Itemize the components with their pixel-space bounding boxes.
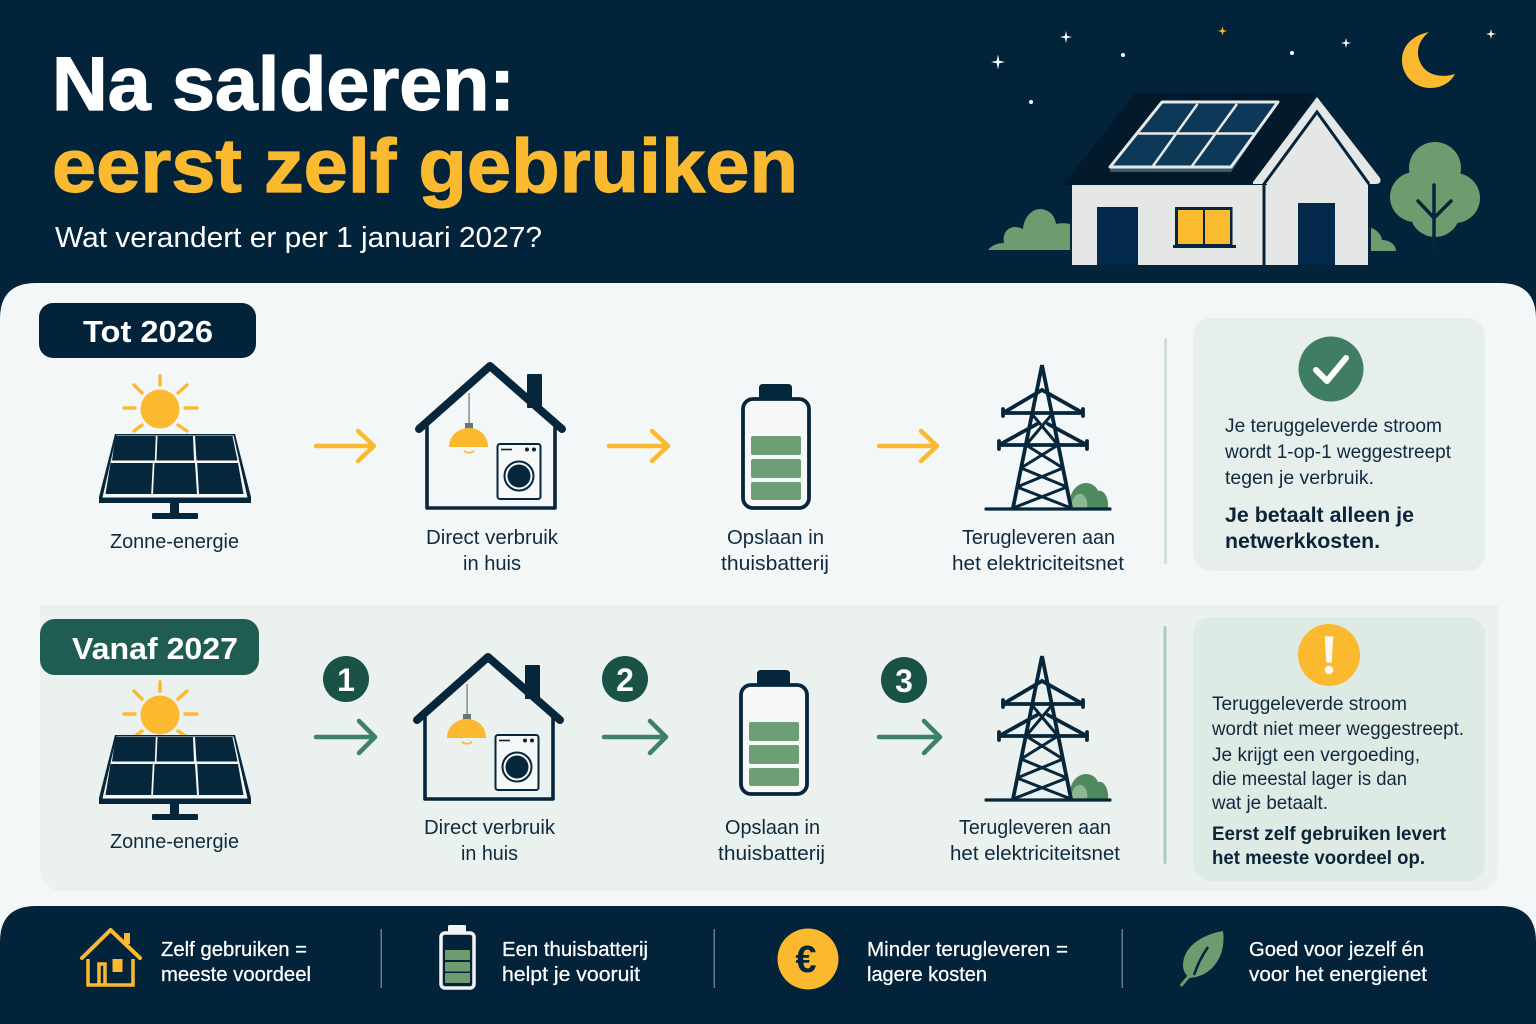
title: Na salderen:	[52, 42, 515, 127]
icon: warning	[1298, 624, 1360, 686]
doors	[1097, 207, 1138, 265]
label: opslaan: thuisbatterij	[721, 553, 829, 575]
label: opslaan	[718, 817, 825, 865]
card text: Je krijgt een vergoeding,	[1212, 744, 1420, 766]
card text: wordt niet meer weggestreept.	[1211, 718, 1464, 740]
arrow	[316, 721, 375, 753]
text: zelf gebruiken: meeste voordeel	[161, 963, 311, 986]
label: direct verbruik: Direct verbruik	[426, 527, 559, 549]
header background	[0, 0, 1536, 300]
card conclusion: het meeste voordeel op.	[1212, 847, 1425, 869]
label: direct verbruik	[426, 527, 559, 575]
label: direct verbruik: in huis	[463, 553, 521, 575]
icon: house with solar panels	[988, 93, 1480, 265]
badge: vanaf 2027: Vanaf 2027	[72, 631, 238, 666]
card text: Teruggeleverde stroom	[1212, 693, 1407, 715]
left bush	[988, 209, 1070, 250]
step 2: 2	[616, 662, 634, 698]
flow row: vanaf 2027	[99, 656, 1120, 865]
card text: wat je betaalt.	[1211, 792, 1328, 814]
footer	[0, 906, 1536, 1024]
text: thuisbatterij: Een thuisbatterij	[502, 938, 648, 961]
label: direct verbruik	[424, 817, 556, 865]
card: vanaf 2027	[1193, 617, 1485, 881]
label: direct verbruik: in huis	[461, 843, 518, 865]
flow row: tot 2026	[99, 365, 1124, 575]
text: zelf gebruiken: Zelf gebruiken =	[161, 938, 307, 961]
card text: tegen je verbruik.	[1225, 467, 1374, 489]
icon: euro: €	[795, 939, 817, 981]
step 3	[881, 657, 927, 703]
label: opslaan	[721, 527, 829, 575]
card: tot 2026	[1193, 318, 1485, 571]
card conclusion: Eerst zelf gebruiken levert	[1212, 823, 1446, 845]
step 2	[602, 656, 648, 702]
icon: solar panel	[99, 682, 251, 820]
main panel	[0, 283, 1536, 1024]
label: opslaan: thuisbatterij	[718, 843, 825, 865]
badge: vanaf 2027	[40, 619, 259, 675]
label: zonne-energie: Zonne-energie	[110, 531, 239, 553]
window	[1173, 207, 1236, 248]
label: terugleveren	[950, 817, 1120, 865]
icon: small battery	[441, 925, 474, 988]
step 1: 1	[337, 662, 355, 698]
icon: leaf	[1182, 931, 1224, 985]
icon: euro	[778, 928, 838, 990]
arrow	[879, 431, 937, 461]
badge: tot 2026	[39, 303, 256, 358]
card text: wordt 1-op-1 weggestreept	[1224, 441, 1452, 463]
icon: moon	[1402, 32, 1455, 88]
label: terugleveren	[952, 527, 1124, 575]
icon: house	[419, 366, 562, 508]
gable	[1253, 97, 1380, 265]
card conclusion	[1225, 504, 1414, 553]
right bush	[1371, 228, 1396, 251]
label: direct verbruik: Direct verbruik	[424, 817, 556, 839]
solar panels	[1110, 102, 1278, 172]
card text: die meestal lager is dan	[1212, 768, 1407, 790]
text: goed voor jezelf	[1249, 938, 1427, 986]
icon: pylon	[986, 365, 1110, 509]
icon: pylon	[986, 656, 1110, 800]
icon: solar panel	[99, 376, 251, 519]
band: vanaf 2027	[40, 605, 1498, 891]
label: terugleveren: het elektriciteitsnet	[950, 843, 1120, 865]
card text	[1224, 415, 1452, 489]
icon: check	[1298, 336, 1364, 402]
card conclusion	[1212, 823, 1446, 869]
roof	[1063, 93, 1317, 185]
step 1	[323, 656, 369, 702]
icon: house	[417, 657, 560, 799]
label: terugleveren: Terugleveren aan	[959, 817, 1111, 839]
label: terugleveren: het elektriciteitsnet	[952, 553, 1124, 575]
text: thuisbatterij	[502, 938, 648, 986]
card text	[1211, 693, 1464, 814]
icon: small house	[82, 930, 140, 985]
icon: battery	[743, 384, 809, 508]
card conclusion: netwerkkosten.	[1225, 530, 1380, 553]
label: opslaan: Opslaan in	[725, 817, 820, 839]
arrow	[879, 721, 940, 753]
icon: night sky stars	[991, 26, 1496, 104]
label: opslaan: Opslaan in	[727, 527, 824, 549]
text: minder terugleveren	[867, 938, 1068, 986]
text: minder terugleveren: lagere kosten	[867, 963, 987, 986]
wall	[1072, 185, 1368, 265]
title	[52, 42, 798, 209]
card text: Je teruggeleverde stroom	[1225, 415, 1442, 437]
label: zonne-energie: Zonne-energie	[110, 831, 239, 853]
arrow	[604, 721, 666, 753]
text: minder terugleveren: Minder terugleveren =	[867, 938, 1068, 961]
step 3: 3	[895, 663, 913, 699]
card conclusion: Je betaalt alleen je	[1225, 504, 1414, 527]
label: terugleveren: Terugleveren aan	[962, 527, 1115, 549]
title: eerst zelf gebruiken	[52, 124, 798, 209]
tree	[1390, 142, 1480, 251]
text: thuisbatterij: helpt je vooruit	[502, 963, 640, 986]
arrow	[316, 431, 374, 461]
text: goed voor jezelf: voor het energienet	[1249, 963, 1427, 986]
text: zelf gebruiken	[161, 938, 311, 986]
subtitle: Wat verandert er per 1 januari 2027?	[55, 222, 542, 254]
icon: battery	[741, 670, 807, 794]
text: goed voor jezelf: Goed voor jezelf én	[1249, 938, 1424, 961]
badge: tot 2026: Tot 2026	[83, 314, 213, 349]
arrow	[609, 431, 668, 461]
